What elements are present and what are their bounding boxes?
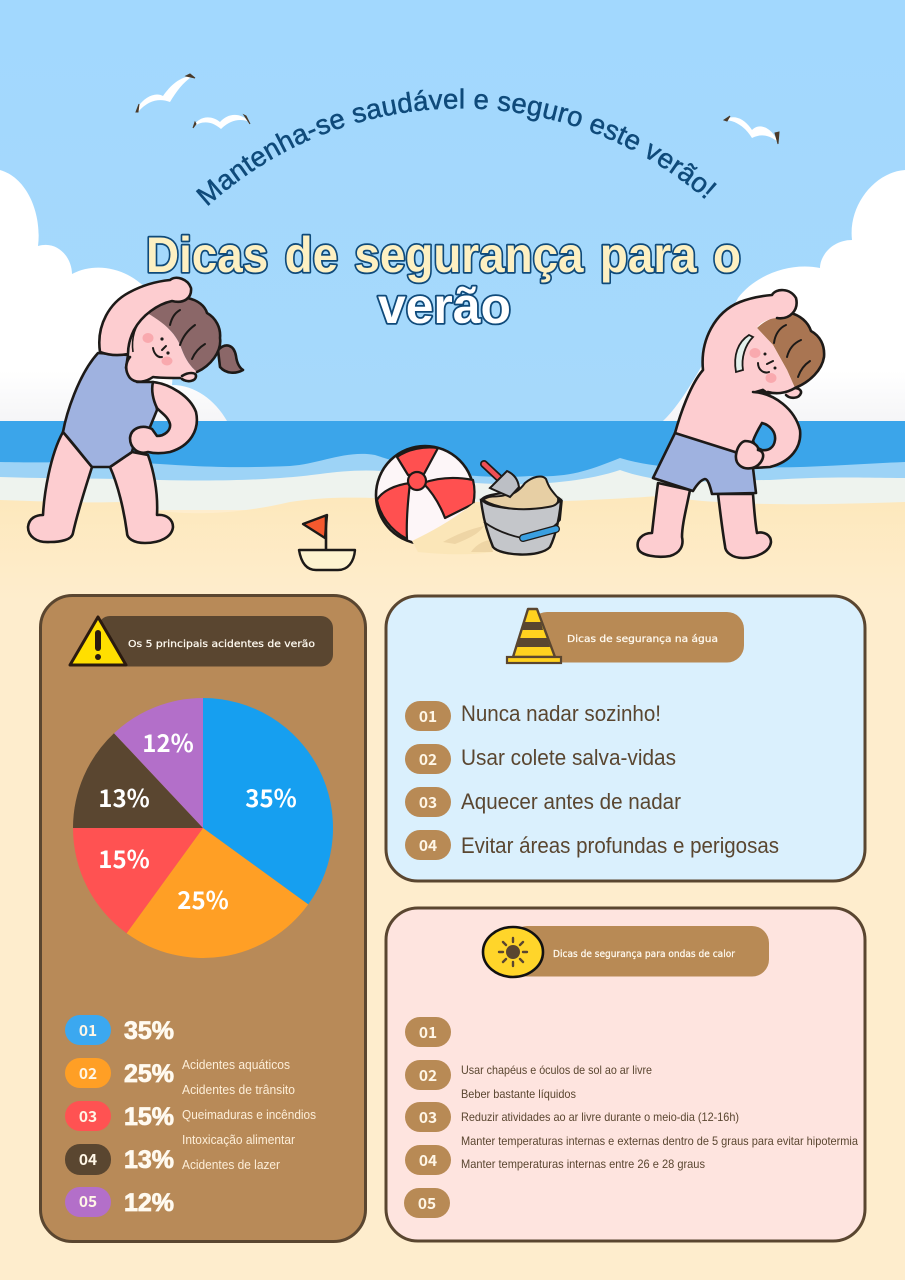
- pie chart: 13%: [98, 779, 150, 814]
- curved subtitle: Mantenha-se saudável e seguro este verão!: [196, 88, 717, 206]
- panel: top 5 summer accidents: [40, 596, 366, 1242]
- wave: light blue: [0, 454, 905, 500]
- water tip 1: 01: [419, 705, 437, 727]
- illustration: toy boat: [299, 515, 355, 570]
- legend percentages: 15%: [124, 1103, 174, 1131]
- legend number badges: 05: [79, 1190, 97, 1212]
- girl arm on hip: [130, 382, 197, 453]
- illustration: beach ball: [376, 446, 474, 544]
- heat number badges: 04: [419, 1149, 437, 1171]
- boy chin shadow: [753, 389, 770, 394]
- girl ear: [182, 373, 196, 381]
- water tip 2: Usar colete salva-vidas: [461, 745, 676, 770]
- girl swimsuit: [63, 353, 157, 467]
- wave: foam: [0, 470, 905, 510]
- heading banner: water: Dicas de segurança na água: [567, 633, 718, 645]
- illustration: sand mound: [412, 503, 493, 554]
- heat number badges: 01: [419, 1021, 437, 1043]
- water tip 3: [405, 787, 681, 817]
- heat tips text: Usar chapéus e óculos de sol ao ar livre: [461, 1063, 652, 1077]
- heat number badges: 02: [419, 1064, 437, 1086]
- boy hair outline: [773, 313, 824, 388]
- legend percentages: 25%: [124, 1060, 174, 1088]
- icon: sun: [483, 927, 543, 977]
- pie chart: 35%: [245, 779, 297, 814]
- legend percentages: [124, 1017, 174, 1217]
- sand: [0, 496, 905, 600]
- boy hand: [736, 441, 763, 468]
- water tip 2: [405, 744, 676, 774]
- cloud: right: [663, 170, 905, 421]
- water tip 4: [405, 830, 779, 860]
- boy body outline: [675, 290, 800, 468]
- sand in bucket: [483, 476, 558, 509]
- heat number badges: 03: [419, 1106, 437, 1128]
- legend labels: Acidentes aquáticos: [182, 1057, 290, 1072]
- girl hair: [147, 298, 220, 372]
- legend labels: Acidentes de lazer: [182, 1157, 281, 1172]
- heat number badges: [404, 1017, 451, 1218]
- legend number badges: 04: [79, 1148, 97, 1170]
- legend percentages: 35%: [124, 1017, 174, 1045]
- main title: Dicas de segurança para o: [146, 227, 741, 283]
- girl headband strap: [132, 316, 144, 352]
- boy shorts: [653, 433, 756, 494]
- girl face: [126, 313, 197, 382]
- beach scene background: [0, 0, 905, 600]
- water tip 4: Evitar áreas profundas e perigosas: [461, 833, 779, 858]
- heat tips text: Manter temperaturas internas entre 26 e 28 graus: [461, 1157, 705, 1171]
- heat tips text: Manter temperaturas internas e externas dentro de 5 graus para evitar hipotermia: [461, 1134, 858, 1148]
- heading banner: water: [507, 609, 744, 663]
- girl blush and features: [142, 310, 205, 366]
- shovel handle: [484, 464, 499, 478]
- water tip 3: Aquecer antes de nadar: [461, 789, 681, 814]
- seagull 2: [193, 115, 250, 129]
- boy legs: [638, 483, 771, 558]
- bucket handle: [484, 500, 562, 538]
- seagull 3: [724, 116, 779, 144]
- legend number badges: 03: [79, 1105, 97, 1127]
- illustration: boy stretching: [638, 290, 824, 558]
- boy blush and features: [750, 325, 810, 383]
- pie chart: [73, 698, 333, 958]
- girl head outline: [126, 298, 220, 382]
- pie chart: 12%: [142, 724, 194, 759]
- water tip 1: Nunca nadar sozinho!: [461, 701, 661, 726]
- heat tips text: [461, 1063, 858, 1171]
- boy hand on hip gap: [753, 423, 775, 450]
- heat tips text: Reduzir atividades ao ar livre durante o meio-dia (12-16h): [461, 1110, 739, 1124]
- water tip 2: 02: [419, 748, 437, 770]
- cloud: left: [0, 170, 227, 421]
- boy goggle strap: [735, 335, 753, 372]
- legend labels: Acidentes de trânsito: [182, 1082, 295, 1097]
- heading banner: accidents: [70, 616, 333, 666]
- legend number badges: [65, 1015, 111, 1217]
- legend labels: Queimaduras e incêndios: [182, 1107, 316, 1122]
- legend number badges: 02: [79, 1062, 97, 1084]
- shovel blade: [490, 471, 519, 497]
- water tip 4: 04: [419, 834, 437, 856]
- legend number badges: 01: [79, 1019, 97, 1041]
- icon: warning triangle: [70, 617, 126, 665]
- water tip 3: 03: [419, 791, 437, 813]
- girl ponytail: [218, 345, 243, 373]
- pie chart: 25%: [177, 881, 229, 916]
- seagull 1: [136, 74, 195, 112]
- boy hair: [757, 313, 824, 388]
- girl raised arm: [99, 278, 191, 355]
- boy ear: [786, 388, 801, 398]
- heading banner: heat: Dicas de segurança para ondas de calor: [553, 949, 736, 960]
- main title: verão: [378, 278, 511, 334]
- illustration: girl stretching: [28, 278, 243, 543]
- heading banner: heat: [483, 926, 769, 977]
- illustration: sand bucket with shovel: [481, 464, 562, 555]
- legend percentages: 12%: [124, 1189, 174, 1217]
- legend labels: [182, 1057, 316, 1172]
- legend percentages: 13%: [124, 1146, 174, 1174]
- heading banner: accidents: Os 5 principais acidentes de verão: [128, 639, 315, 650]
- panel: water safety tips: [386, 596, 865, 881]
- panel: heat wave safety tips: [386, 908, 865, 1241]
- legend labels: Intoxicação alimentar: [182, 1132, 296, 1147]
- water tip 1: [405, 701, 661, 731]
- pie chart: 15%: [98, 840, 150, 875]
- sea: [0, 421, 905, 491]
- icon: traffic cone: [507, 609, 561, 663]
- boy torso and raised arm: [675, 290, 800, 469]
- heat tips text: Beber bastante líquidos: [461, 1087, 576, 1101]
- main title: [146, 227, 741, 334]
- heat number badges: 05: [418, 1192, 436, 1214]
- girl legs: [28, 432, 173, 543]
